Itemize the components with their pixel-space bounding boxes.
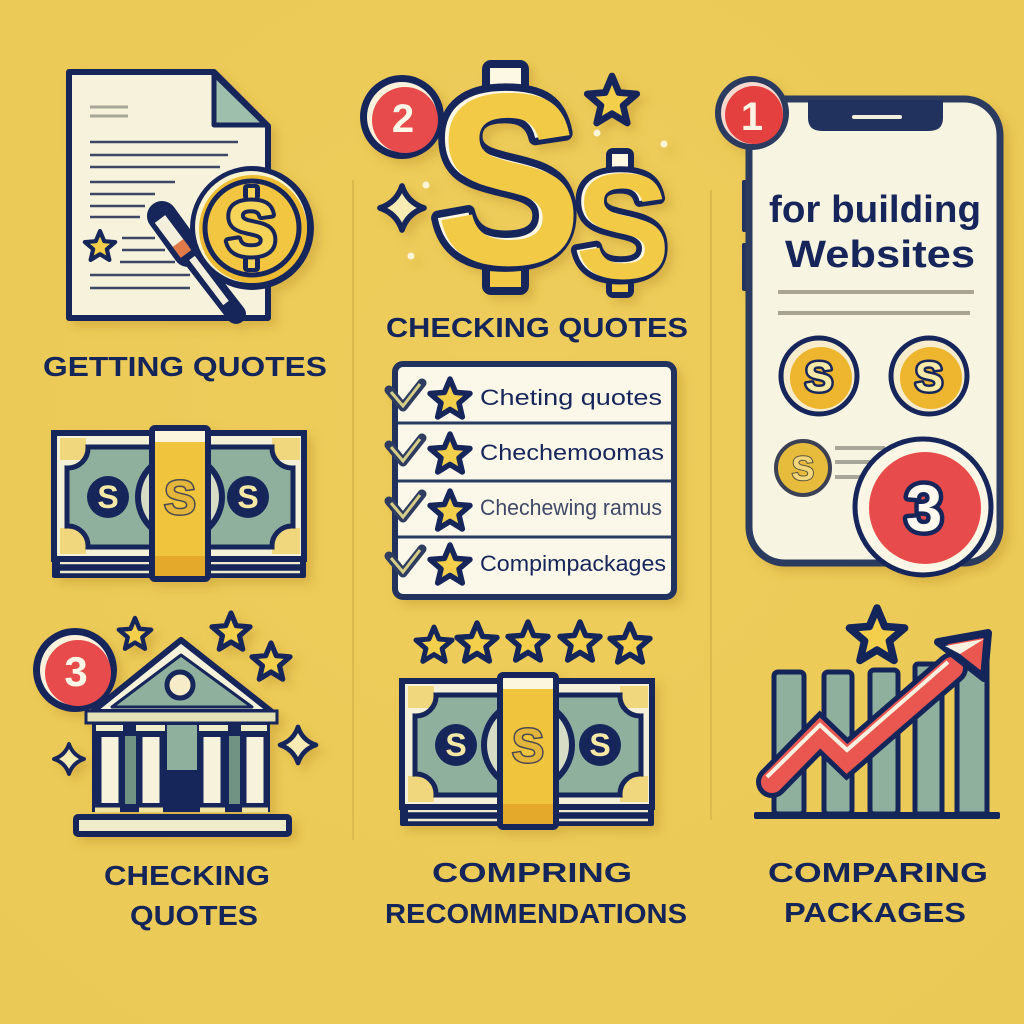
panel: checklist: Chechemoomas <box>480 440 664 465</box>
icon: banknotes centre <box>400 675 654 827</box>
icon: document with coin and pen <box>69 72 314 318</box>
icon: smartphone: 3 <box>906 471 942 545</box>
icon: document with coin and pen: S <box>226 187 276 272</box>
panel: checklist <box>389 364 674 597</box>
icon: stack of banknotes <box>52 428 306 579</box>
icon: banknotes centre: S <box>512 720 544 773</box>
panel: checklist: Cheting quotes <box>480 385 662 410</box>
icon: dollar signs with badge: S <box>431 41 579 315</box>
heading: checking quotes lower left <box>104 860 270 931</box>
phone title <box>769 189 981 276</box>
icon: stack of banknotes: S <box>164 472 196 525</box>
heading: comparing packages <box>768 857 988 928</box>
icon: banknotes centre: S <box>445 727 467 763</box>
icon: banknotes centre: S <box>589 727 611 763</box>
icon: dollar signs with badge <box>360 41 670 317</box>
heading: checking quotes lower left: CHECKING <box>104 860 270 891</box>
heading: getting quotes: GETTING QUOTES <box>43 351 327 382</box>
heading: checking quotes lower left: QUOTES <box>130 900 258 931</box>
icon: dollar signs with badge: S <box>435 43 582 317</box>
heading: comparing recommendations <box>385 857 687 929</box>
icon: stack of banknotes: S <box>237 479 259 515</box>
icon: stack of banknotes: S <box>97 479 119 515</box>
panel: checklist: Chechewing ramus <box>480 495 662 520</box>
icon: dollar signs with badge: S <box>572 143 668 310</box>
icon: bar chart with rising arrow <box>754 608 1000 819</box>
icon: smartphone: S <box>805 353 833 400</box>
icon: smartphone <box>715 76 1000 575</box>
heading: checking quotes centre: CHECKING QUOTES <box>386 312 688 343</box>
heading: comparing recommendations: RECOMMENDATIONS <box>385 898 687 929</box>
icon: bank building with badge: 3 <box>64 648 88 695</box>
heading: comparing recommendations: COMPRING <box>432 857 632 888</box>
icon: dollar signs with badge: S <box>575 144 670 311</box>
phone title: Websites <box>785 234 975 276</box>
icon: smartphone: 1 <box>741 95 763 139</box>
icon: row of stars <box>416 622 650 662</box>
icon: smartphone: S <box>792 450 814 488</box>
heading: comparing packages: COMPARING <box>768 857 988 888</box>
icon: bank building with badge <box>33 613 316 834</box>
panel: checklist: Compimpackages <box>480 551 666 576</box>
heading: comparing packages: PACKAGES <box>784 897 966 928</box>
icon: dollar signs with badge: 2 <box>392 97 414 141</box>
phone title: for building <box>769 189 981 231</box>
icon: smartphone: S <box>915 353 943 400</box>
